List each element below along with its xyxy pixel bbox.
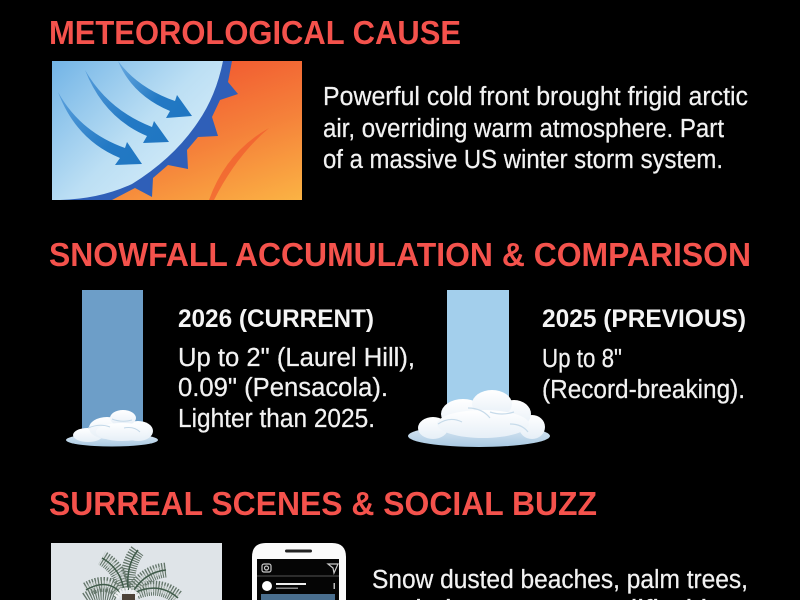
text: 2026 current: Up to 2" (Laurel Hill),	[178, 344, 415, 372]
heading: snowfall accumulation and comparison: SNOWFALL ACCUMULATION & COMPARISON	[49, 236, 751, 273]
cold air arrow 1	[118, 61, 192, 118]
cold air arrow 3	[58, 92, 142, 165]
text: cold front description: air, overriding warm atmosphere. Part	[323, 115, 724, 143]
bar: 2025 snowfall	[408, 290, 550, 447]
text: surreal scenes description: Snow dusted beaches, palm trees,	[372, 566, 748, 594]
icon: large snow pile	[408, 390, 550, 447]
heading: surreal scenes and social buzz: SURREAL SCENES & SOCIAL BUZZ	[49, 485, 597, 522]
warm air streak	[209, 128, 269, 200]
cold air arrow 2	[85, 70, 169, 143]
avatar	[262, 581, 272, 591]
text: cold front description: Powerful cold front brought frigid arctic	[323, 83, 748, 111]
cold air mass	[52, 61, 223, 200]
text: cold front description	[323, 83, 748, 174]
palm trunk	[122, 594, 135, 600]
palm fronds	[86, 550, 178, 600]
illustration: cold front map	[52, 61, 302, 200]
photo: snowy palm tree	[51, 543, 222, 600]
cold front band with teeth	[52, 61, 238, 200]
text: 2025 previous: 2025 (PREVIOUS)	[542, 305, 746, 333]
text: 2026 current: 2026 (CURRENT)	[178, 305, 374, 333]
text: 2026 current: Lighter than 2025.	[178, 405, 375, 433]
text: 2026 current	[178, 305, 415, 433]
icon: smartphone with social feed	[252, 543, 346, 600]
post image	[261, 594, 335, 600]
text: 2025 previous: (Record-breaking).	[542, 376, 745, 404]
text: cold front description: of a massive US winter storm system.	[323, 146, 723, 174]
heading: meteorological cause: METEOROLOGICAL CAUSE	[49, 14, 461, 51]
text: 2026 current: 0.09" (Pensacola).	[178, 374, 388, 402]
bar: 2026 snowfall	[66, 290, 158, 446]
text: 2025 previous: Up to 8"	[542, 345, 622, 373]
text: 2025 previous	[542, 305, 746, 404]
send icon	[328, 564, 338, 573]
icon: small snow pile	[66, 410, 158, 446]
camera icon	[262, 564, 271, 572]
